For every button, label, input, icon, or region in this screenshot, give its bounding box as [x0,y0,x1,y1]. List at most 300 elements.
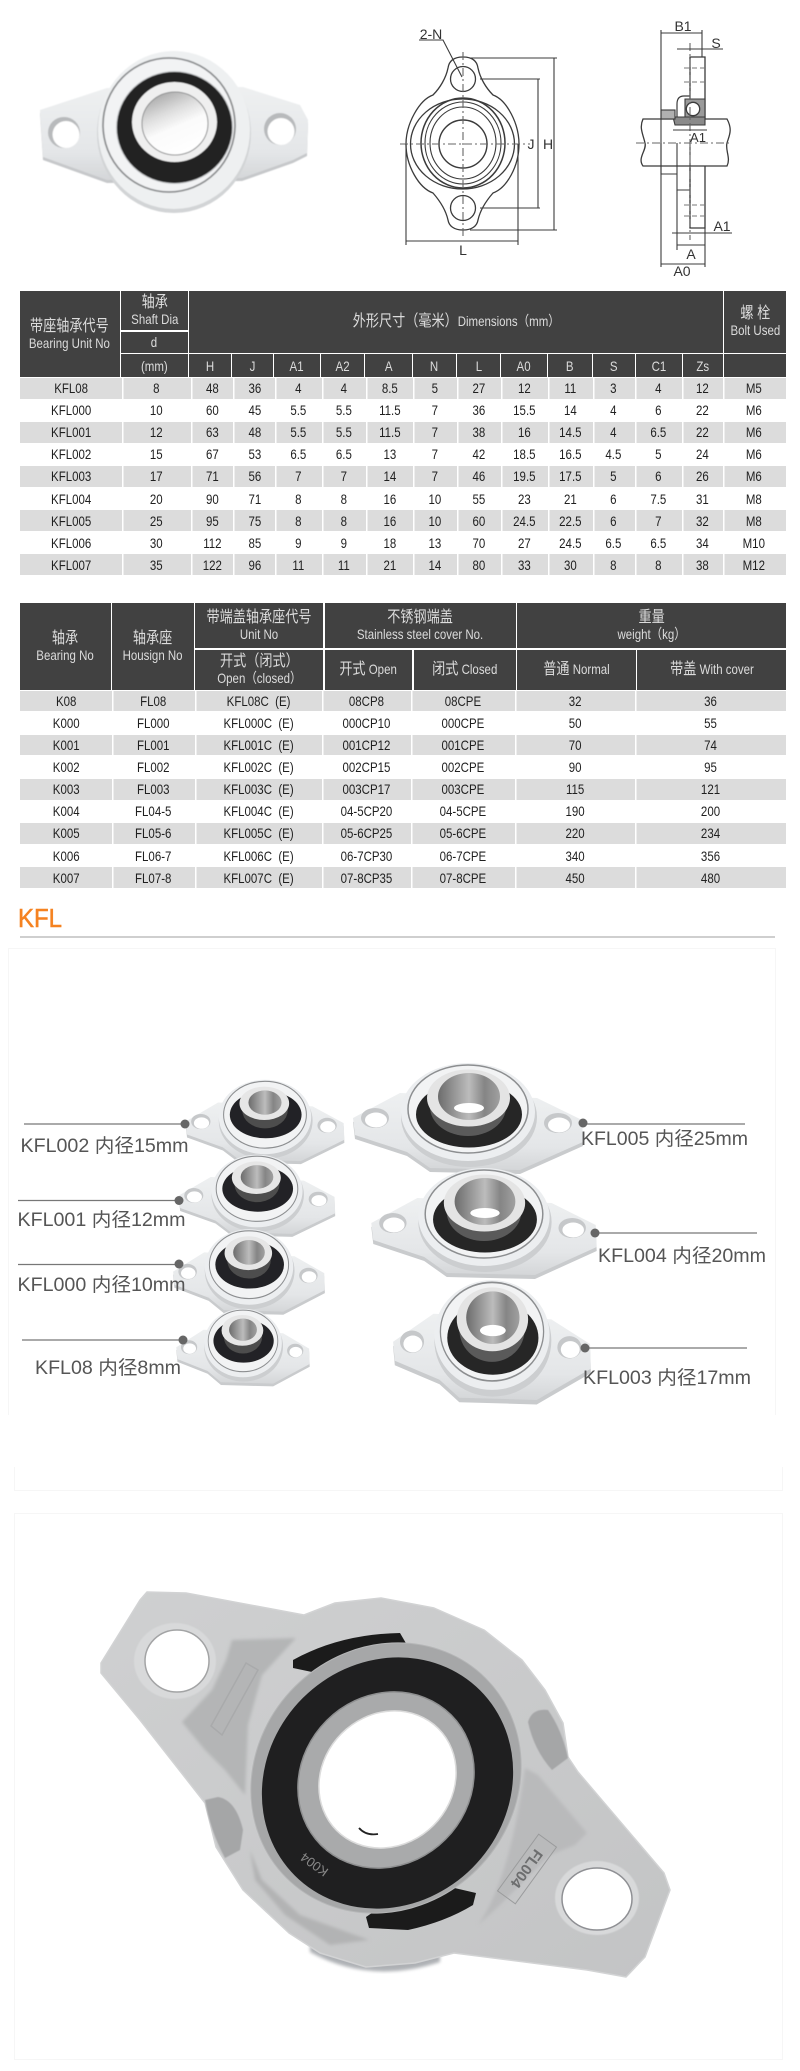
row: KFL007: 122 [203,557,222,573]
row: KFL08 [20,378,786,399]
row: KFL08: M5 [746,380,762,396]
callout: KFL005: KFL005 内径25mm [581,1128,748,1150]
row: KFL000: M6 [746,402,762,418]
table: dimensions [20,291,786,575]
row: KFL006: 13 [429,535,442,551]
row: KFL007: 38 [696,557,708,573]
row: K007: 480 [701,870,720,886]
table 1 header: d [151,334,158,350]
row: KFL001: 48 [248,424,261,440]
row: K007: K007 [53,870,80,886]
row: KFL08: 5 [432,380,438,396]
bearing: KFL001 [179,1155,335,1237]
row: KFL005: 10 [429,513,442,529]
table 1 header [20,291,786,377]
row: KFL001: 4 [610,424,617,440]
table 1 header: B [566,358,574,374]
row: KFL006 [51,535,765,551]
row: KFL003: 5 [610,468,617,484]
table 2 header: 普通 Normal [543,661,610,678]
row: KFL004: KFL004 [51,491,91,507]
row: KFL007: 96 [248,557,261,573]
row: K003 [20,779,786,800]
bore mark [359,1828,378,1834]
row: KFL001 [20,422,786,443]
row: K006: 06-7CP30 [341,848,392,864]
row: KFL006: 6.5 [606,535,622,551]
row: K08: 36 [704,693,717,709]
row: KFL08: 48 [206,380,219,396]
recess: lower right [478,1768,587,1925]
row: K006: K006 [53,848,80,864]
row: K002: 002CPE [441,759,484,775]
row: KFL001: 5.5 [336,424,352,440]
heading: KFL: KFL [18,903,62,933]
row: KFL006: KFL006 [51,535,91,551]
row: KFL007: 80 [473,557,485,573]
row: KFL001: 22 [696,424,708,440]
row: KFL001: 63 [206,424,219,440]
row: K007: 450 [565,870,584,886]
table 1 header: A0 [517,358,531,374]
callout: KFL08 [22,1336,188,1379]
row: KFL002: KFL002 [51,446,91,462]
bearing: KFL000 [173,1229,325,1315]
callout: KFL003: KFL003 内径17mm [583,1367,751,1389]
row: KFL003: 6 [655,468,662,484]
row: K004 [53,803,720,819]
row: K006: 356 [701,848,720,864]
row: KFL007: 11 [338,557,350,573]
casting body [101,1592,670,1977]
table 2 header: Housign No [123,647,183,663]
row: K005: 05-6CPE [440,825,486,841]
row: KFL002: 53 [248,446,261,462]
row: KFL007: 14 [429,557,442,573]
row: KFL004: M8 [746,491,762,507]
row: K004: 04-5CPE [440,803,486,819]
row: KFL005: 75 [248,513,261,529]
table 2 header: 闭式 Closed [432,661,497,678]
row: KFL000: 7 [432,402,438,418]
row: KFL004: 21 [564,491,576,507]
row: KFL004: 55 [473,491,485,507]
row: K007: 07-8CP35 [341,870,392,886]
table 2 header: 重量 [639,609,665,626]
row: KFL08: 11 [564,380,576,396]
row: KFL001: 12 [150,424,163,440]
row: KFL005: 22.5 [559,513,581,529]
row: KFL003: 56 [248,468,261,484]
row: KFL007: 8 [655,557,662,573]
row: KFL000: 60 [206,402,219,418]
row: KFL004: 71 [248,491,261,507]
row: KFL007: 21 [383,557,396,573]
row: KFL004: 8 [341,491,347,507]
row: KFL006: 27 [518,535,531,551]
row: K08: FL08 [141,693,167,709]
row: KFL006: 18 [383,535,396,551]
row: KFL003: 7 [432,468,438,484]
row: KFL007: KFL007 [51,557,91,573]
callout: KFL005 [578,1118,748,1150]
row: KFL004: 31 [696,491,708,507]
row: KFL006: 85 [248,535,261,551]
row: K006: 06-7CPE [440,848,486,864]
row: K007: FL07-8 [135,870,172,886]
row: K005: K005 [53,825,80,841]
lighter rims around the mounting holes [134,1623,216,1699]
row: KFL004: 6 [610,491,617,507]
row: KFL005: 60 [473,513,485,529]
row: K003: FL003 [137,781,170,797]
table 1 header: J [250,358,255,374]
label: A0: A0 [673,263,691,279]
callout: KFL001: KFL001 内径12mm [18,1209,186,1231]
row: KFL007: M12 [743,557,765,573]
row: KFL006: 34 [696,535,708,551]
table 1 header: 轴承 [141,294,167,311]
row: KFL001: 16 [518,424,531,440]
row: KFL002: M6 [746,446,762,462]
table 1 header: (mm) [141,358,168,374]
row: K005: 05-6CP25 [341,825,392,841]
table 1 header: A2 [335,358,350,374]
label: S: S [711,35,721,51]
stamp: FL004 [498,1834,556,1904]
label: A: A [686,246,696,262]
table 2 header: Unit No [240,626,278,642]
table 2 header: Open（closed） [217,670,301,686]
row: KFL003: 17.5 [559,468,581,484]
row: KFL007: 35 [150,557,163,573]
row: KFL08: KFL08 [54,380,88,396]
row: KFL007: 11 [293,557,305,573]
diagram: side section drawing [636,18,732,279]
row: KFL004: 10 [429,491,442,507]
row: K001: 74 [704,737,717,753]
row: KFL004: 8 [295,491,302,507]
row: KFL002: 24 [696,446,708,462]
row: KFL005: 16 [383,513,396,529]
panel: large bearing photo frame [14,1514,782,2060]
row: K004: 190 [565,803,584,819]
row: KFL001: KFL001 [51,424,91,440]
row: KFL000: 22 [696,402,708,418]
row: K006: KFL006C (E) [223,848,294,864]
row: KFL006: 6.5 [650,535,666,551]
row: K001 [20,735,786,755]
panel: size comparison [8,948,776,1415]
row: KFL001: 38 [473,424,485,440]
row: KFL005: 32 [696,513,708,529]
row: KFL003: 7 [295,468,302,484]
row: KFL000 [51,402,762,418]
row: K002: KFL002C (E) [223,759,294,775]
row: K003: 003CPE [441,781,484,797]
row: KFL006: 9 [295,535,302,551]
row: KFL005: 6 [610,513,617,529]
row: K001: FL001 [137,737,170,753]
row: K001: 001CPE [441,737,484,753]
row: KFL004: 90 [206,491,219,507]
callout: KFL002 [20,1120,190,1157]
row: K002: K002 [53,759,80,775]
silver race [195,1587,577,1969]
row: K006 [53,848,720,864]
table 1 header: C1 [651,358,666,374]
bearing: KFL004 [371,1168,597,1279]
row: KFL002: 7 [432,446,438,462]
empty framed strip [14,1467,782,1490]
photo: top bearing unit [40,51,308,213]
divider under heading [20,936,775,938]
table 1 header: 外形尺寸（毫米）Dimensions（mm） [352,313,559,330]
callout: KFL000: KFL000 内径10mm [18,1274,186,1296]
bearing: KFL08 [176,1309,310,1386]
label: H: H [543,136,553,152]
row: KFL003: M6 [746,468,762,484]
row: KFL005: M8 [746,513,762,529]
row: KFL002 [51,446,762,462]
row: KFL005: 25 [150,513,163,529]
row: KFL003: 19.5 [513,468,535,484]
row: K08: 08CP8 [349,693,384,709]
table 1 body [20,378,786,575]
row: KFL005: 24.5 [513,513,535,529]
table 2 header: Stainless steel cover No. [357,626,483,642]
stamp: FL004: FL004 [506,1846,546,1891]
table 1 header: S [610,358,618,374]
table 2 header: 不锈钢端盖 [387,609,453,626]
row: K000: 000CPE [441,715,484,731]
row: K001: K001 [53,737,80,753]
row: K002: 002CP15 [343,759,390,775]
row: K000: K000 [53,715,80,731]
row: K007: KFL007C (E) [223,870,294,886]
row: K003: 003CP17 [343,781,390,797]
table 1 header: A1 [290,358,304,374]
row: K007: 07-8CPE [440,870,486,886]
row: KFL001: 6.5 [650,424,666,440]
row: KFL000: KFL000 [51,402,91,418]
row: K003: K003 [53,781,80,797]
row: KFL002: 13 [383,446,396,462]
row: K005: 234 [701,825,720,841]
row: KFL003: 46 [473,468,485,484]
row: K005: KFL005C (E) [223,825,294,841]
table 1 header: Shaft Dia [131,311,178,327]
row: K08: K08 [56,693,76,709]
row: KFL08: 27 [473,380,485,396]
collar [262,1656,510,1904]
row: KFL001: 5.5 [291,424,307,440]
row: K000: KFL000C (E) [223,715,294,731]
row: KFL001: 7 [432,424,438,440]
recess: lower left notch [205,1797,243,1858]
table 1 header: Zs [696,358,709,374]
stamp recess: left rectangle [211,1663,258,1735]
row: K08: 32 [568,693,581,709]
row: K08: 08CPE [445,693,481,709]
row: KFL005 [20,510,786,531]
row: KFL002: 5 [655,446,662,462]
label: J: J [528,136,534,152]
row: KFL000: 15.5 [513,402,535,418]
row: KFL08: 12 [518,380,531,396]
row: KFL007 [20,554,786,575]
row: KFL000: 11.5 [379,402,400,418]
table 2 body [20,690,786,888]
photo: large bearing [101,1587,670,1977]
row: KFL001: 11.5 [379,424,400,440]
row: KFL005: 95 [206,513,219,529]
row: KFL08: 12 [696,380,708,396]
row: K006: FL06-7 [135,848,172,864]
row: KFL005: KFL005 [51,513,91,529]
row: K08 [20,690,786,711]
recess: right notch [528,1710,568,1770]
row: K007 [20,867,786,888]
row: K08: KFL08C (E) [227,693,290,709]
row: K005: 220 [565,825,584,841]
row: KFL004 [51,491,762,507]
callout: KFL000 [18,1260,186,1296]
row: K002 [53,759,717,775]
recess: upper left [182,1638,296,1795]
row: K001: KFL001C (E) [223,737,294,753]
row: K004: 200 [701,803,720,819]
stamp: K004: K004 [298,1850,331,1880]
row: K002: 95 [704,759,717,775]
row: K003: 115 [566,781,584,797]
table 1 header: A [385,358,392,374]
row: KFL004: 7.5 [650,491,666,507]
row: KFL000: 5.5 [291,402,307,418]
row: KFL007: 33 [518,557,531,573]
row: KFL003: 26 [696,468,708,484]
row: KFL006: 70 [473,535,485,551]
row: KFL001: M6 [746,424,762,440]
row: K000: 000CP10 [343,715,390,731]
crescent gaps [293,1633,407,1680]
callout: KFL003 [580,1344,751,1389]
table 2 header: 带端盖轴承座代号 [207,609,312,626]
table 1 header: L [475,358,482,374]
table 2 header: Bearing No [37,647,94,663]
table: covers and weight [20,603,786,888]
row: KFL006: 112 [203,535,221,551]
row: KFL005: 8 [295,513,302,529]
bearing: KFL002 [186,1080,344,1164]
row: KFL004: 23 [518,491,531,507]
row: K005 [20,823,786,844]
bearing: KFL005 [353,1063,583,1174]
row: K002: 90 [568,759,581,775]
row: KFL004: 16 [383,491,396,507]
row: KFL006: 24.5 [559,535,581,551]
row: KFL002: 16.5 [559,446,581,462]
row: K004: K004 [53,803,80,819]
table 1 header: N [430,358,439,374]
callout: KFL001 [18,1196,186,1231]
row: KFL000: 6 [655,402,662,418]
row: KFL08: 4 [655,380,662,396]
table 2 header [20,603,786,690]
row: KFL000: 45 [248,402,261,418]
row: KFL003: 14 [383,468,396,484]
row: K004: KFL004C (E) [223,803,294,819]
row: KFL003: 7 [341,468,347,484]
row: K002: FL002 [137,759,170,775]
row: KFL002: 15 [150,446,163,462]
row: KFL006: 30 [150,535,163,551]
row: KFL003: 71 [206,468,219,484]
row: KFL007: 8 [610,557,617,573]
table 1 header: Bolt Used [730,322,780,338]
row: KFL006: 9 [341,535,347,551]
row: K001: 001CP12 [343,737,390,753]
row: KFL007: 30 [564,557,576,573]
row: KFL005: 8 [341,513,347,529]
row: KFL000: 10 [150,402,163,418]
row: KFL002: 42 [473,446,485,462]
table 2 header: 带盖 With cover [670,661,753,678]
table 1 header: 螺 栓 [740,305,770,322]
row: KFL001: 14.5 [559,424,581,440]
row: K000: 50 [568,715,581,731]
diagram: front view drawing [400,26,557,258]
row: KFL003: KFL003 [51,468,91,484]
row: K004: 04-5CP20 [341,803,392,819]
row: K000: 55 [704,715,717,731]
table 2 header: 开式（闭式） [220,653,299,670]
callout: KFL08: KFL08 内径8mm [35,1357,181,1379]
row: K004: FL04-5 [135,803,172,819]
label: A1 upper: A1 [690,130,706,145]
row: KFL003: 17 [150,468,163,484]
bore [291,1683,484,1876]
row: KFL000: 36 [473,402,485,418]
callout: KFL004: KFL004 内径20mm [598,1245,766,1267]
row: KFL004: 20 [150,491,163,507]
row: KFL006: M10 [743,535,765,551]
table 2 header: weight（kg） [618,626,686,642]
table 1 header: 带座轴承代号 [30,318,109,334]
row: KFL005: 7 [655,513,662,529]
label: A1 lower: A1 [713,218,731,234]
callout: KFL004 [590,1228,766,1267]
row: KFL002: 18.5 [513,446,535,462]
label: 2-N: 2-N [420,26,442,42]
row: K005: FL05-6 [135,825,172,841]
row: KFL002: 4.5 [606,446,622,462]
row: K006: 340 [565,848,584,864]
recess: lower left [250,1850,369,1945]
row: KFL000: 14 [564,402,576,418]
row: KFL08: 4 [295,380,302,396]
row: K001: 70 [568,737,581,753]
row: KFL002: 67 [206,446,219,462]
row: KFL000: 5.5 [336,402,352,418]
table 1 header: Bearing Unit No [29,334,110,350]
table 2 header: 轴承座 [133,630,173,647]
shadow under casting [310,1945,440,1971]
row: KFL08: 3 [610,380,617,396]
row: K000: FL000 [137,715,170,731]
row: K003: KFL003C (E) [223,781,294,797]
mounting holes [145,1630,209,1692]
